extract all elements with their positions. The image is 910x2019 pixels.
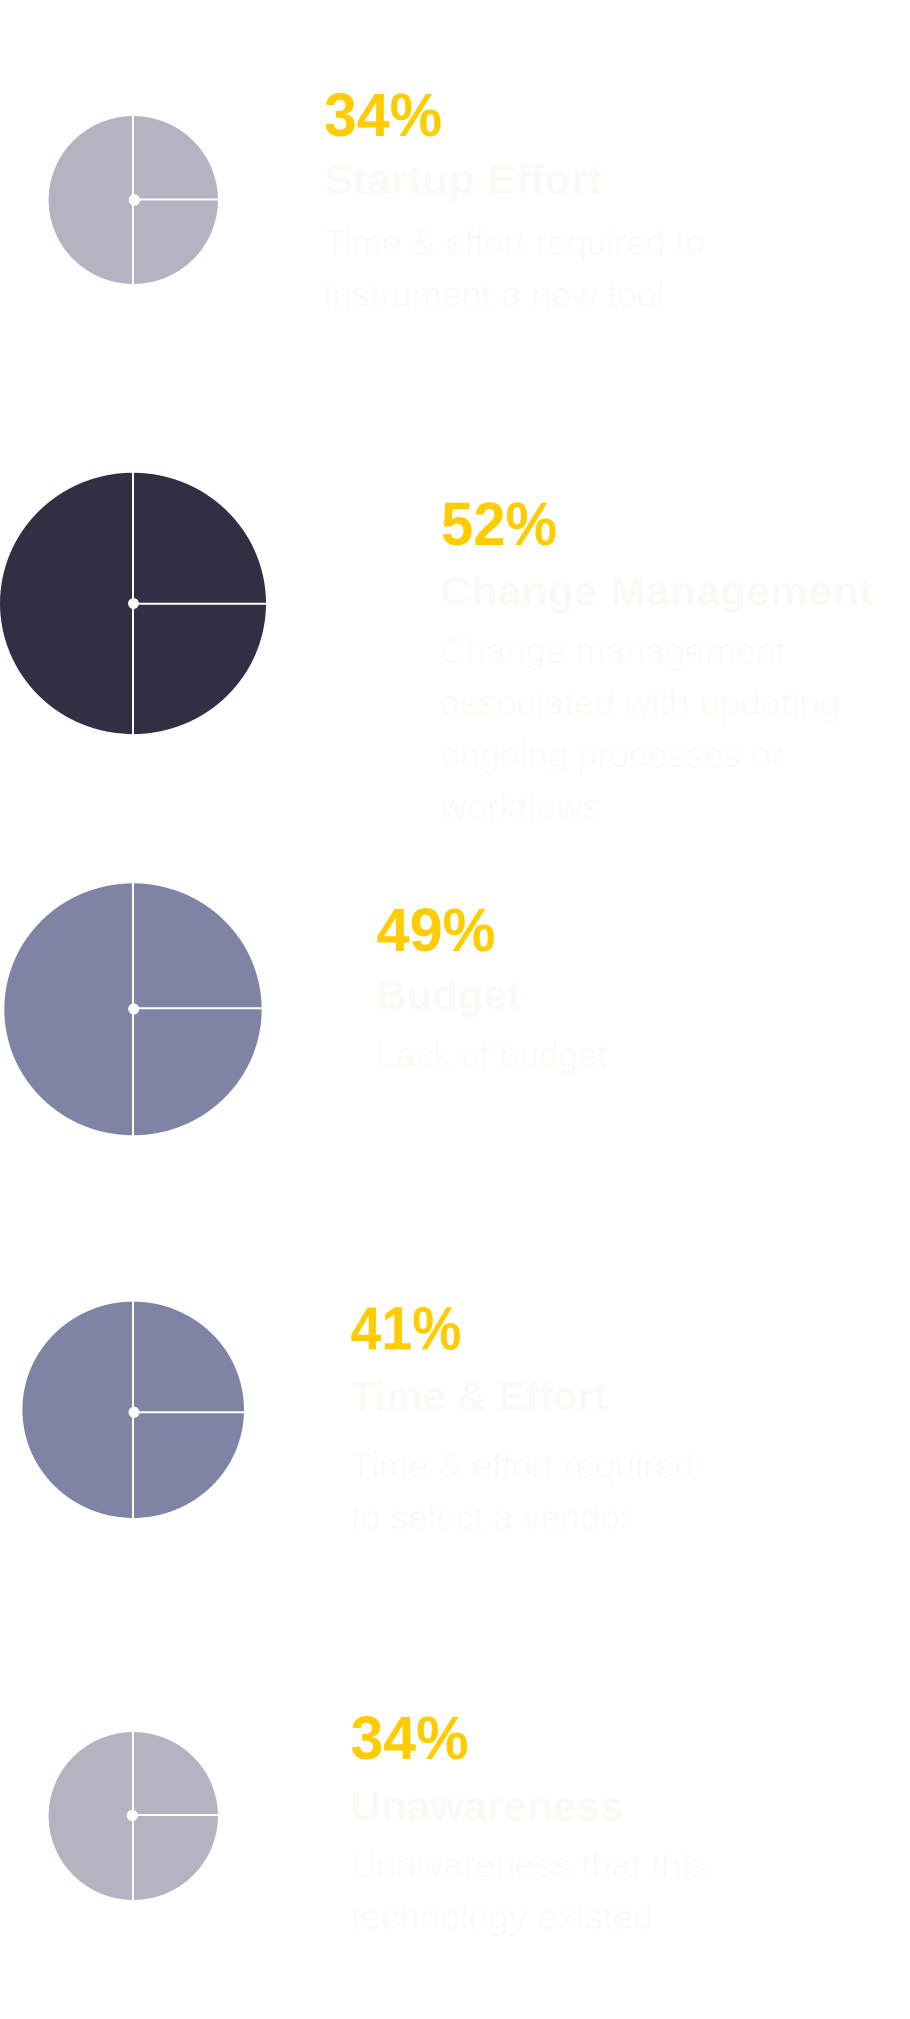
panel: time and effort [22, 1294, 694, 1538]
text: description [439, 632, 840, 827]
heading: Time & Effort: Time & Effort [350, 1373, 608, 1419]
text: description: ongoing processes or [440, 736, 783, 775]
stat: 34%: 34% [324, 81, 442, 149]
icon: pie chart 41% [22, 1300, 245, 1519]
text: description: Unawareness that this [350, 1846, 708, 1885]
panel: unawareness [49, 1704, 708, 1937]
text: description: to select a vendor [350, 1499, 632, 1538]
heading: Unawareness: Unawareness [350, 1783, 624, 1829]
panel: startup effort [49, 81, 705, 314]
stat: 41%: 41% [350, 1294, 462, 1362]
text: description [350, 1846, 708, 1937]
stat: 52%: 52% [441, 490, 557, 558]
text: description: technology existed [350, 1898, 654, 1937]
text: description: associated with updating [440, 684, 840, 723]
text: description [350, 1447, 694, 1538]
text: description: instrument a new tool [324, 276, 665, 314]
icon: pie chart 49% [4, 882, 263, 1137]
heading: Budget: Budget [376, 972, 521, 1018]
text: description: Time & effort required to [324, 224, 705, 262]
text: description: Time & effort required [350, 1447, 694, 1486]
stat: 49%: 49% [376, 896, 496, 964]
icon: pie chart 52% [0, 472, 267, 735]
text: description: workflows [439, 788, 601, 827]
heading: Startup Effort: Startup Effort [324, 156, 602, 202]
panel: change management [0, 472, 873, 827]
text: description: Change management [440, 632, 785, 671]
panel: budget [4, 882, 608, 1137]
stat: 34%: 34% [350, 1704, 468, 1772]
text: description [324, 224, 705, 314]
icon: pie chart 34% [49, 1731, 219, 1901]
heading: Change Management: Change Management [440, 568, 873, 614]
icon: pie chart 34% [49, 115, 219, 285]
text: description: Lack of budget [376, 1036, 608, 1075]
